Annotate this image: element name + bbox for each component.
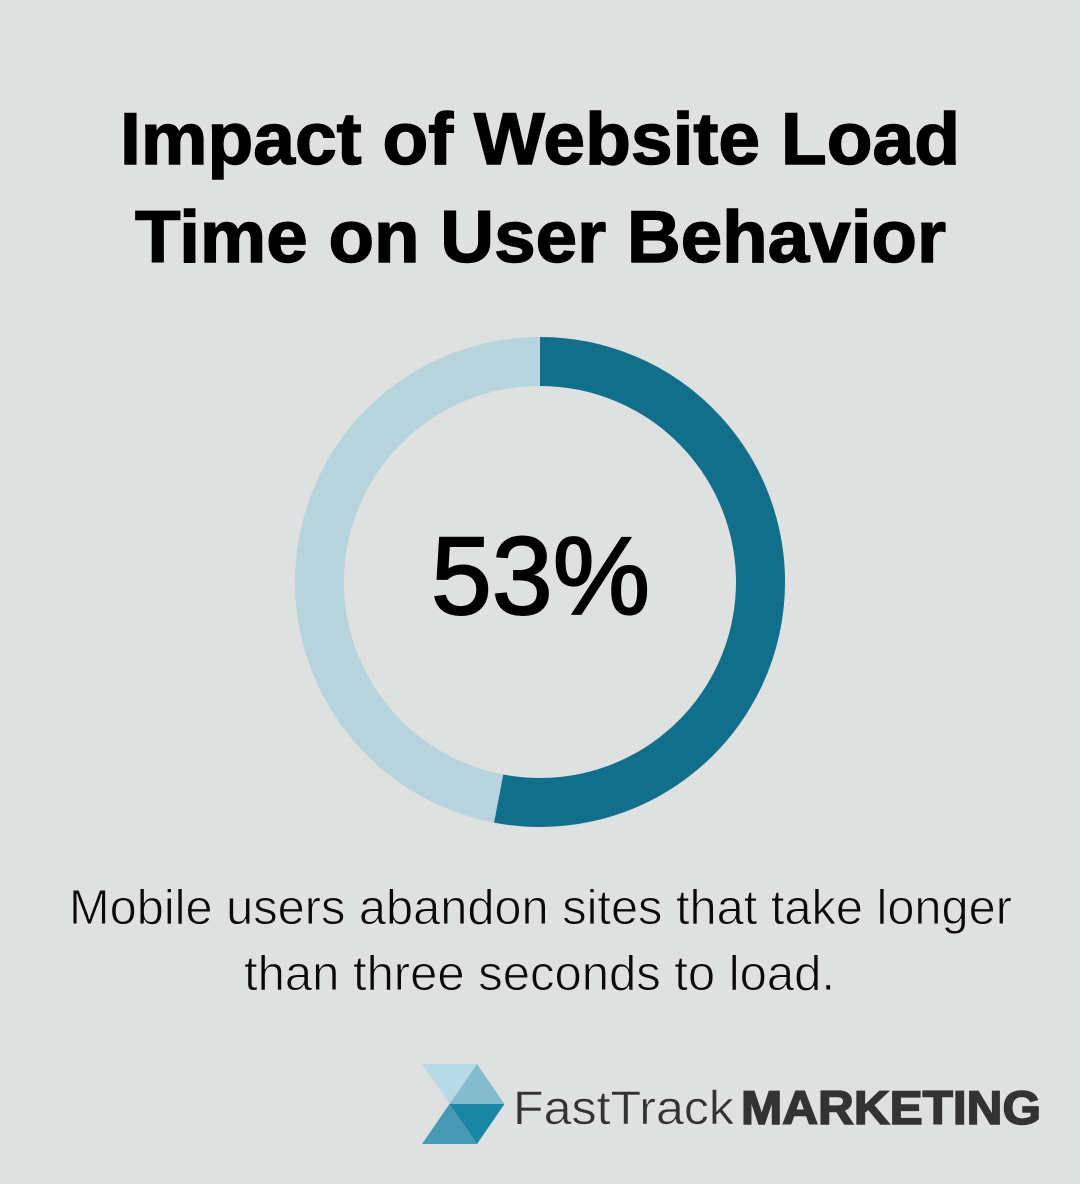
donut value: 53% xyxy=(431,515,650,638)
icon: logo chevron xyxy=(422,1064,504,1144)
donut chart: 53% xyxy=(320,362,760,803)
description: Mobile users abandon sites that take longer xyxy=(69,881,1012,935)
title xyxy=(120,99,960,278)
logo: FastTrack Marketing xyxy=(422,1064,1041,1144)
logo wordmark: MARKETING xyxy=(741,1081,1041,1134)
title: Time on User Behavior xyxy=(135,197,946,278)
description xyxy=(69,881,1012,1001)
description: than three seconds to load. xyxy=(244,947,835,1001)
title: Impact of Website Load xyxy=(120,99,960,180)
logo wordmark: FastTrack xyxy=(513,1081,735,1134)
logo wordmark xyxy=(513,1081,1041,1134)
